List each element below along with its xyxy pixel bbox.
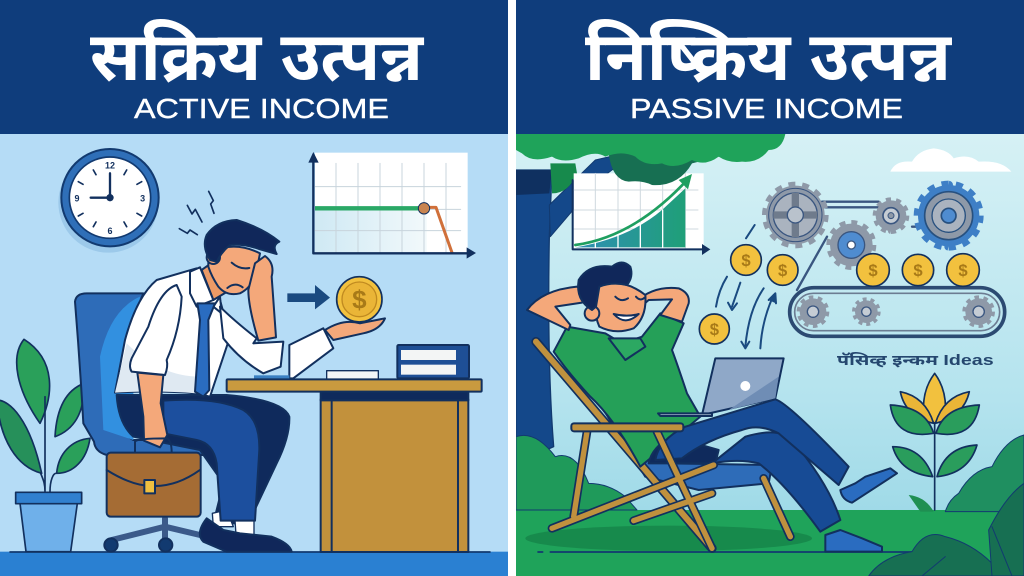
gears and conveyor: [766, 185, 1005, 336]
coins: $: [741, 251, 751, 270]
front leg: [163, 400, 259, 521]
chair: [75, 293, 223, 552]
head: [208, 247, 260, 294]
left forearm and hand: [137, 373, 167, 447]
icon: gold coin: [337, 277, 382, 322]
hair: [205, 220, 279, 262]
shoes: [840, 468, 897, 503]
right arm raised: [220, 307, 283, 373]
icon: gold coin: $: [352, 284, 367, 314]
floor: [0, 552, 508, 576]
title: Hindi active income: सक्रिय उत्पन्न: [90, 19, 425, 95]
neck: [202, 262, 230, 300]
rear leg: [117, 395, 289, 523]
divider: [508, 0, 516, 576]
money flow arrows: [716, 225, 776, 348]
coins: $: [958, 261, 968, 280]
icon: wall clock: 6: [107, 226, 112, 236]
shoes: [200, 518, 292, 552]
subtitle: passive income: PASSIVE INCOME: [630, 93, 903, 124]
coins: $: [913, 261, 923, 280]
bushes: [516, 435, 1024, 576]
shirt torso: [115, 268, 230, 397]
coins: [699, 245, 979, 344]
arms behind head: [527, 287, 594, 330]
ground: [516, 510, 1024, 576]
chair front legs and arm: [552, 432, 790, 548]
coins: $: [778, 261, 788, 280]
title: Hindi passive income: निष्क्रिय उत्पन्न: [585, 19, 953, 95]
plant: [0, 339, 90, 552]
lower leg: [712, 432, 840, 532]
hair: [578, 262, 631, 310]
icon: wall clock: 3: [140, 193, 145, 203]
icon: wall clock: 9: [74, 193, 79, 203]
briefcase: [107, 438, 201, 517]
header: passive income: [516, 0, 1024, 134]
laptop: [658, 358, 784, 416]
rear seat shadow: [649, 437, 719, 463]
desk: [227, 345, 482, 552]
panel: passive income scene: [516, 134, 1024, 576]
torso and shirt: [554, 313, 700, 467]
binders: [397, 345, 469, 378]
head: [595, 283, 646, 331]
tie: [195, 303, 215, 397]
icon: wall clock: 12: [105, 161, 115, 171]
flower pot: [20, 503, 77, 552]
cloud: [890, 148, 1011, 172]
deck chair seat: [562, 337, 772, 490]
gear large blue: [918, 185, 979, 246]
icon: arrow to coin: [287, 285, 330, 309]
stress marks: [179, 191, 214, 235]
header: active income: [0, 0, 508, 134]
conveyor belt: [790, 288, 1005, 336]
subtitle: active income: ACTIVE INCOME: [134, 93, 389, 124]
collar: [190, 267, 222, 313]
gear small: [876, 200, 906, 231]
label: passive income ideas: पॅसिव्ह इन्कम Ideas: [837, 352, 994, 369]
tree: [516, 150, 639, 463]
coins: $: [710, 320, 720, 339]
top leg: [655, 399, 849, 485]
sleeve: [130, 285, 182, 375]
panel: active income scene: [0, 134, 508, 576]
person: relaxed in deck chair: [527, 262, 897, 552]
paper stack: [327, 371, 378, 379]
plant with golden lotus: [890, 373, 979, 512]
chart: rising income: [573, 173, 710, 255]
tree canopy: [516, 134, 785, 185]
chart: flat income then drop: [308, 152, 476, 259]
laptop edge on desk: [254, 375, 289, 379]
socks: [212, 510, 254, 535]
gear large grey: [766, 186, 825, 244]
extended arm: [289, 328, 333, 378]
person: tired worker: [115, 220, 385, 552]
coins: $: [868, 261, 878, 280]
gear blue centre: [830, 224, 873, 266]
icon: wall clock: [58, 149, 159, 253]
back frame: [536, 342, 712, 548]
